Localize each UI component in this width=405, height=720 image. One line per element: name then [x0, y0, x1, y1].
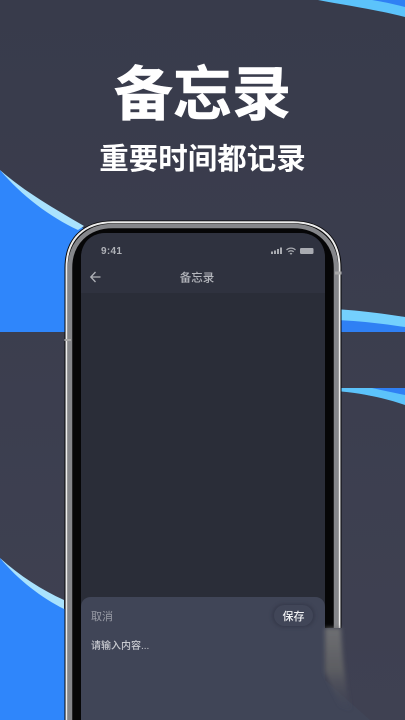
app header title: 备忘录 — [180, 270, 214, 284]
top-right blue ribbon — [318, 0, 405, 17]
status time: 9:41 — [101, 246, 122, 257]
input panel — [81, 597, 370, 720]
phone frame — [64, 220, 342, 720]
icon: back arrow — [91, 272, 100, 282]
subtitle: 重要时间都记录 — [99, 143, 306, 176]
save button: 保存 — [282, 609, 304, 623]
icon: battery — [300, 248, 314, 254]
left blue shape upper — [0, 170, 90, 332]
save button — [272, 604, 315, 628]
cancel label: 取消 — [91, 609, 113, 623]
icon: wifi — [286, 248, 296, 254]
status icons — [271, 248, 314, 254]
icon: signal — [271, 248, 282, 254]
app header bar — [81, 233, 325, 293]
input placeholder: 请输入内容... — [91, 639, 149, 652]
right blue ribbon lower — [335, 388, 405, 405]
screen — [81, 233, 325, 720]
phone mockup — [64, 220, 370, 720]
right blue ribbon upper — [335, 309, 405, 332]
title: 备忘录 — [114, 62, 291, 128]
left blue shape lower — [0, 558, 70, 720]
phone frame fade — [325, 628, 352, 712]
